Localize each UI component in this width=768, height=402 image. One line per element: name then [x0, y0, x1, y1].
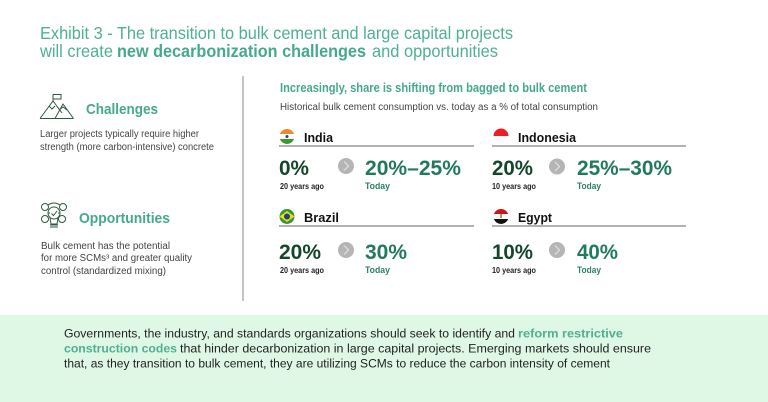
past value: 0%	[279, 157, 309, 180]
title: will create	[39, 41, 113, 61]
heading: challenges: Challenges	[86, 101, 158, 118]
panel: Brazil	[279, 209, 474, 275]
title	[39, 23, 513, 61]
icon: India flag	[280, 129, 294, 144]
opportunities text: Bulk cement has the potential	[41, 241, 170, 252]
past value: 20%	[492, 157, 533, 180]
past value: 20%	[279, 241, 321, 264]
title: and opportunities	[372, 41, 498, 61]
country name: Brazil	[304, 211, 339, 225]
past label: 20 years ago	[280, 182, 324, 191]
panel: challenges	[40, 94, 214, 153]
chart heading: Increasingly, share is shifting from bagged to bulk cement	[280, 81, 588, 95]
arrow	[338, 158, 354, 174]
recommendation text: construction codes	[64, 342, 177, 356]
panel: Indonesia	[492, 128, 686, 191]
icon: mountain with flag	[40, 94, 74, 118]
recommendation text: that, as they transition to bulk cement, they are utilizing SCMs to reduce the carbon intensity of cement	[64, 356, 611, 370]
heading: opportunities: Opportunities	[79, 210, 170, 227]
challenges text: Larger projects typically require higher	[40, 129, 200, 140]
current value: 40%	[577, 241, 618, 264]
current label: Today	[577, 181, 601, 191]
past value: 10%	[492, 241, 533, 264]
panel: India	[279, 129, 474, 191]
opportunities text: for more SCMs³ and greater quality	[41, 253, 192, 264]
title: Exhibit 3 - The transition to bulk cement and large capital projects	[40, 23, 513, 43]
icon: Brazil flag	[280, 209, 294, 224]
current value: 25%–30%	[577, 157, 672, 180]
past label: 10 years ago	[492, 182, 536, 191]
icon: Egypt flag	[494, 209, 508, 224]
past label: 10 years ago	[492, 266, 536, 275]
icon: Indonesia flag	[494, 128, 508, 136]
challenges text	[40, 129, 214, 153]
panel: opportunities	[41, 203, 192, 277]
challenges text: strength (more carbon-intensive) concrete	[40, 142, 214, 153]
opportunities text	[41, 241, 192, 277]
country name: India	[304, 131, 334, 145]
panel: recommendation band	[0, 315, 768, 402]
country name: Indonesia	[518, 131, 577, 145]
arrow	[549, 158, 565, 174]
icon: light bulb network	[42, 203, 66, 227]
recommendation text	[64, 326, 651, 370]
title: new decarbonization challenges	[117, 41, 366, 61]
chart subheading: Historical bulk cement consumption vs. today as a % of total consumption	[280, 102, 598, 113]
current label: Today	[365, 265, 390, 275]
opportunities text: control (standardized mixing)	[41, 266, 166, 277]
country name: Egypt	[518, 211, 553, 225]
current label: Today	[577, 265, 601, 275]
recommendation text: Governments, the industry, and standards organizations should seek to identify and	[64, 326, 515, 340]
current label: Today	[365, 181, 390, 191]
current value: 30%	[365, 241, 407, 264]
recommendation text: that hinder decarbonization in large capital projects. Emerging markets should ensure	[180, 342, 651, 356]
past label: 20 years ago	[280, 266, 324, 275]
arrow	[549, 242, 565, 258]
recommendation text: reform restrictive	[518, 326, 623, 340]
panel: Egypt	[492, 209, 686, 275]
arrow	[338, 242, 354, 258]
current value: 20%–25%	[365, 157, 461, 180]
